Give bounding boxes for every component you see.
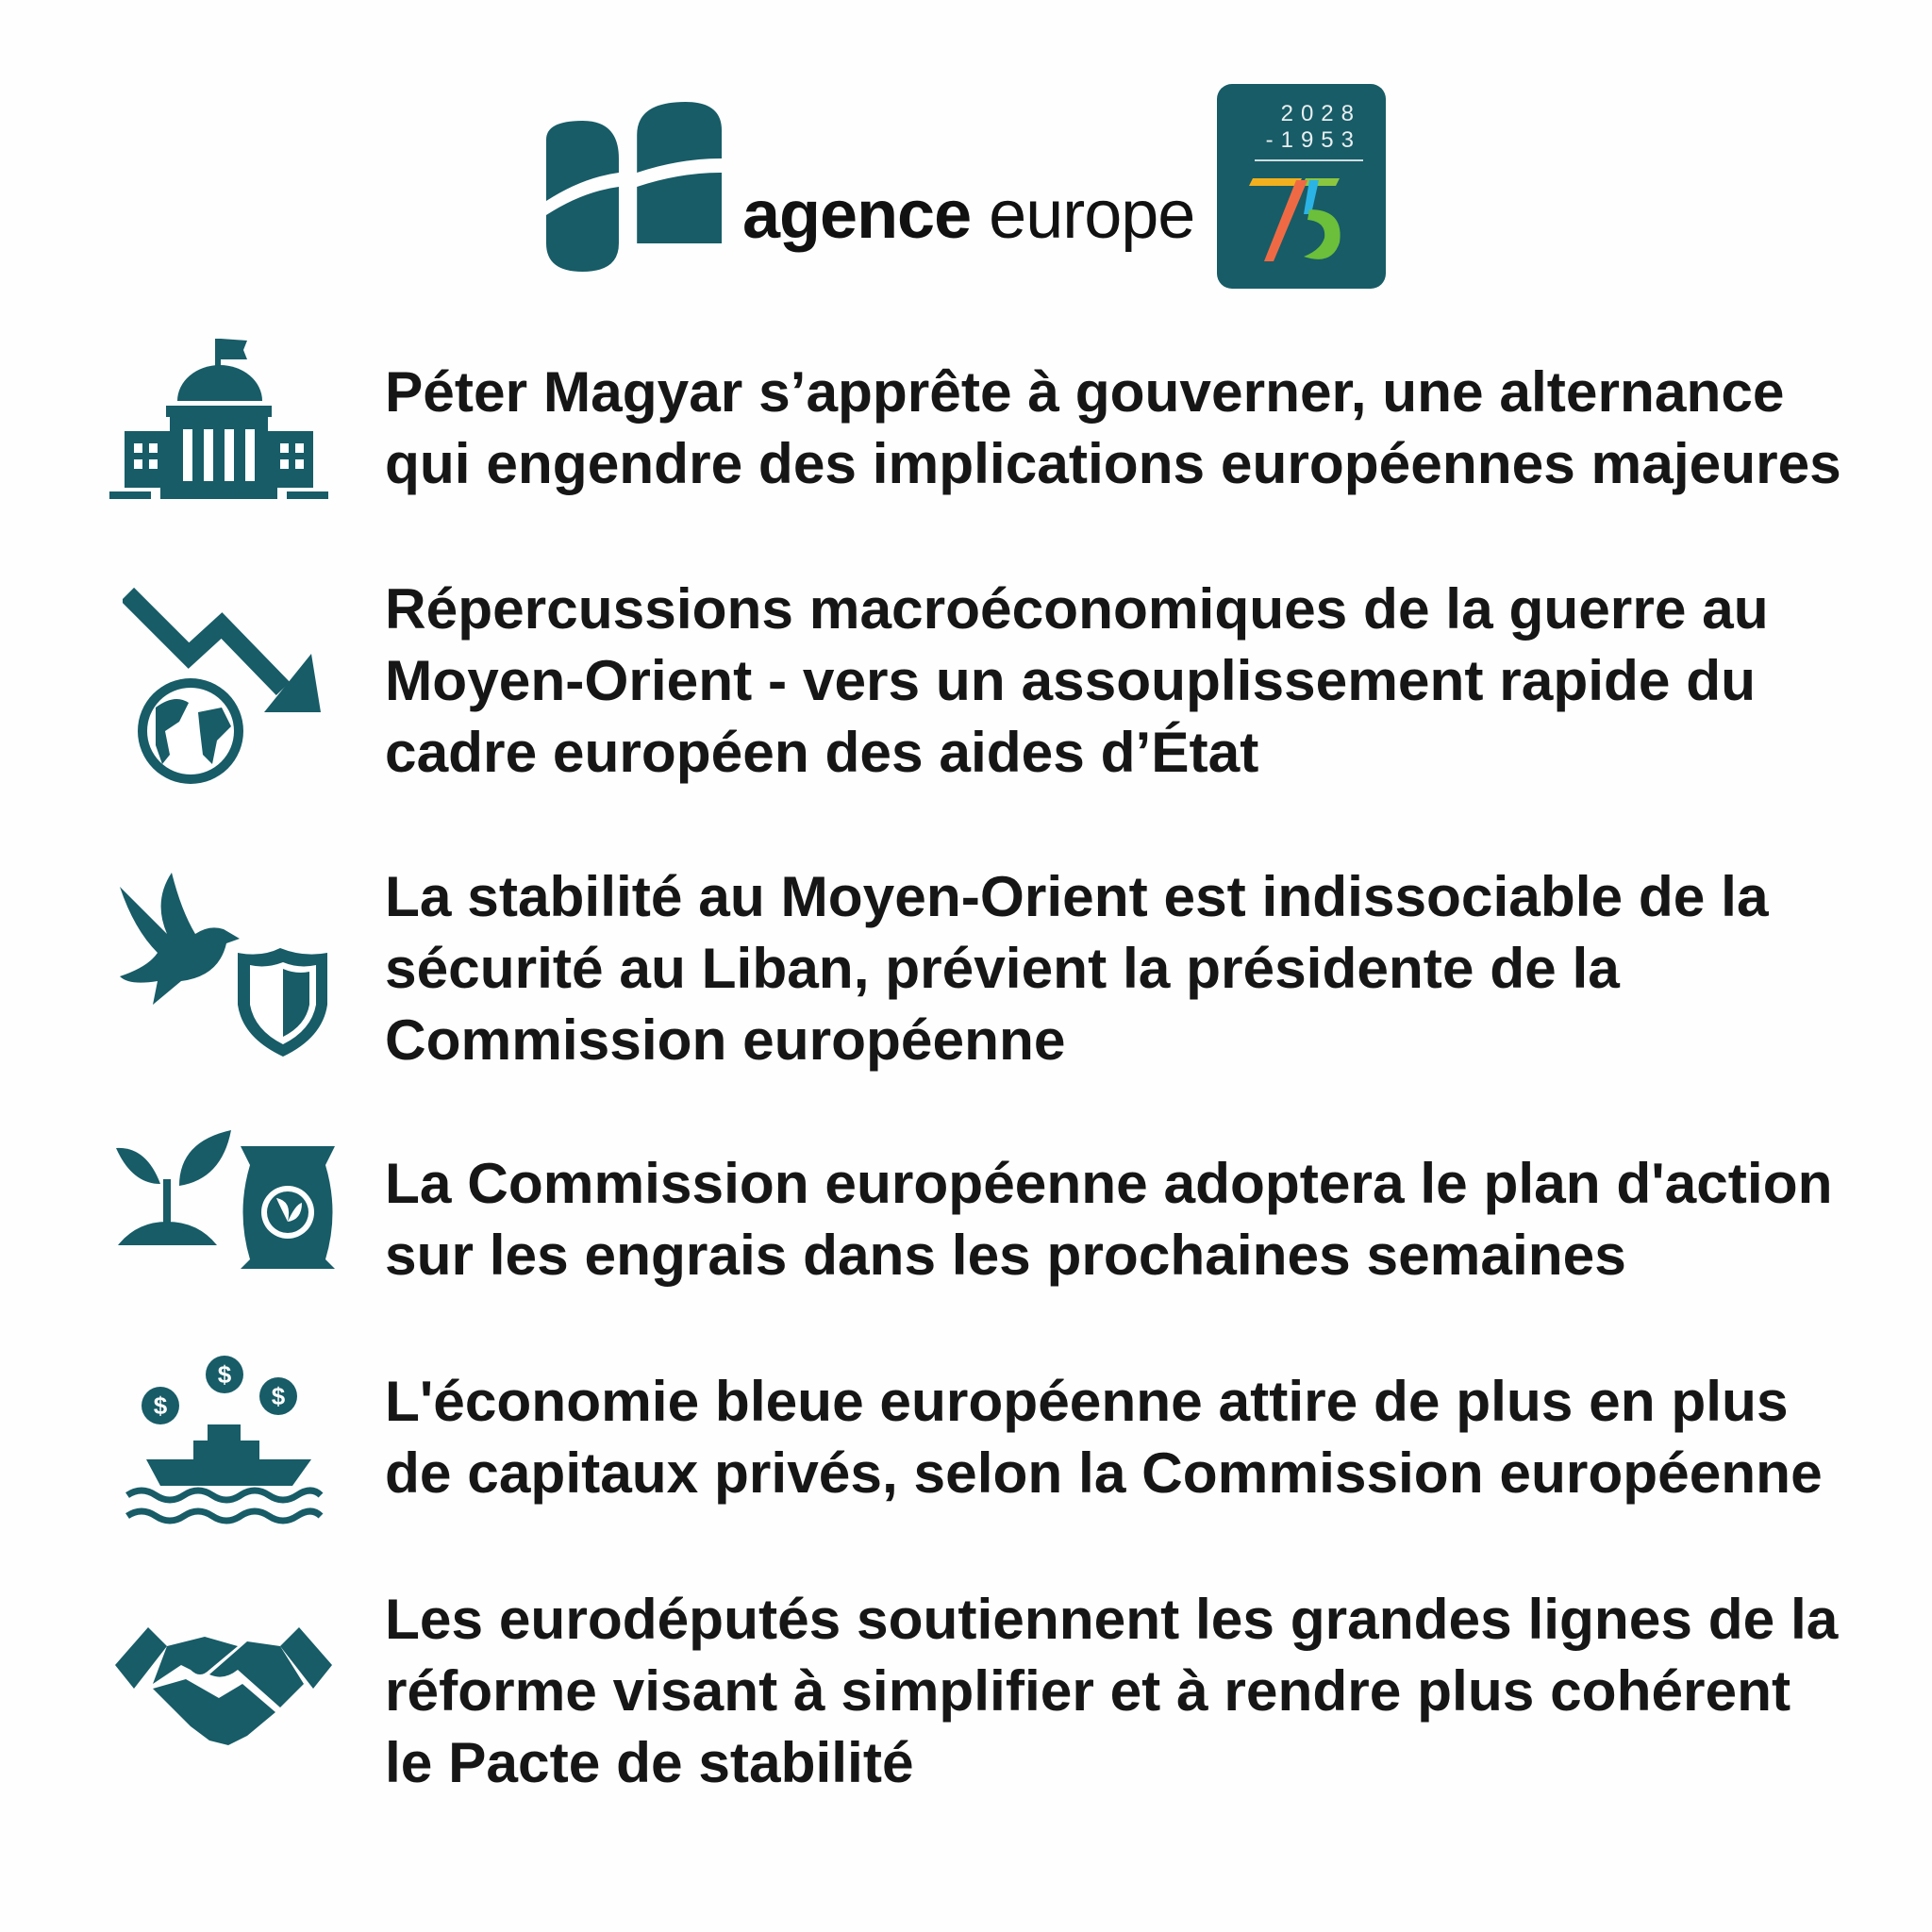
icon: downward chart and globe [123,587,321,784]
logo symbol [546,102,722,272]
text: item 3: La stabilité au Moyen-Orient est indissociable de la [385,864,1769,928]
text: item 5 [385,1369,1823,1505]
badge 75 years: -1953 [1266,127,1361,153]
text: item 1: Péter Magyar s’apprête à gouverner, une alternance [385,359,1785,424]
logo header [546,84,1386,289]
text: item 3: sécurité au Liban, prévient la présidente de la [385,936,1620,1000]
icon: government building [109,339,328,499]
text: item 4: La Commission européenne adoptera le plan d'action [385,1151,1832,1215]
text: item 6: réforme visant à simplifier et à rendre plus cohérent [385,1658,1790,1723]
text: item 6: le Pacte de stabilité [385,1730,914,1794]
icon: handshake [115,1627,332,1745]
text: item 6 [385,1587,1839,1794]
badge 75 years: 2028 [1281,101,1361,126]
icon: dove and shield [120,873,327,1057]
icon: money and ship: $ [272,1382,286,1410]
icon: money and ship: $ [218,1360,232,1389]
logo wordmark: agence europe [742,177,1194,253]
text: item 5: de capitaux privés, selon la Commission européenne [385,1441,1823,1505]
text: item 3 [385,864,1769,1072]
text: item 2: Répercussions macroéconomiques de la guerre au [385,576,1769,641]
text: item 2: Moyen-Orient - vers un assouplissement rapide du [385,648,1756,712]
icon: plant and fertilizer bag [116,1130,335,1269]
text: item 5: L'économie bleue européenne attire de plus en plus [385,1369,1789,1433]
text: item 1 [385,359,1841,495]
text: item 4 [385,1151,1832,1287]
text: item 1: qui engendre des implications européennes majeures [385,431,1841,495]
icon: money and ship [125,1356,323,1524]
text: item 2: cadre européen des aides d’État [385,720,1258,784]
text: item 2 [385,576,1769,784]
text: item 4: sur les engrais dans les prochaines semaines [385,1223,1626,1287]
text: item 3: Commission européenne [385,1008,1065,1072]
icon: money and ship: $ [154,1391,168,1420]
badge 75 years [1217,84,1386,289]
text: item 6: Les eurodéputés soutiennent les grandes lignes de la [385,1587,1838,1651]
